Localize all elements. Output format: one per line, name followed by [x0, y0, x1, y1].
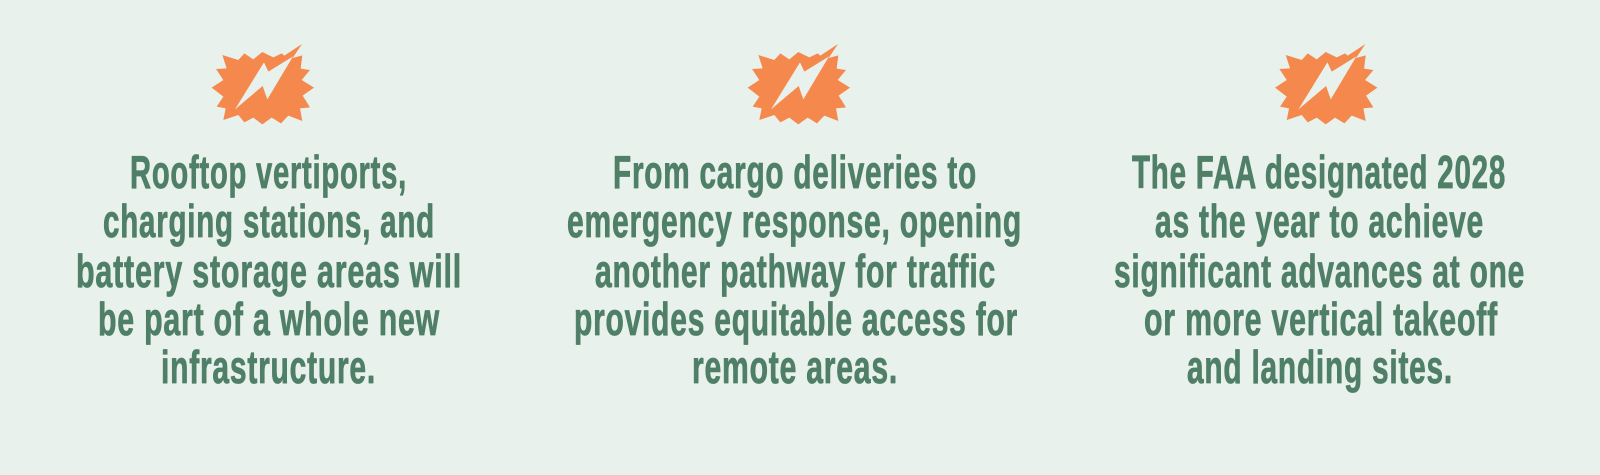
panel: cargo and emergency response	[567, 44, 1022, 393]
text: FAA 2028 description	[1114, 146, 1525, 393]
text: FAA 2028 description: and landing sites.	[1187, 341, 1453, 393]
text: rooftop vertiports description: charging stations, and	[103, 195, 435, 247]
text: rooftop vertiports description: battery storage areas will	[76, 245, 462, 297]
panel: rooftop vertiports	[76, 44, 462, 393]
text: cargo and emergency description: another pathway for traffic	[595, 245, 996, 297]
icon: orange burst with lightning bolt	[212, 44, 314, 124]
text: cargo and emergency description	[567, 146, 1022, 393]
icon: orange burst with lightning bolt	[1275, 44, 1377, 124]
text: cargo and emergency description: From cargo deliveries to	[613, 146, 977, 198]
text: rooftop vertiports description	[76, 146, 462, 393]
text: rooftop vertiports description: infrastructure.	[161, 341, 376, 393]
icon: orange burst with lightning bolt	[748, 44, 850, 124]
text: rooftop vertiports description: be part of a whole new	[98, 293, 440, 345]
panel: FAA 2028 goal	[1114, 44, 1525, 393]
text: cargo and emergency description: remote areas.	[692, 341, 898, 393]
text: cargo and emergency description: provides equitable access for	[574, 293, 1018, 345]
text: cargo and emergency description: emergency response, opening	[567, 195, 1022, 247]
text: rooftop vertiports description: Rooftop vertiports,	[130, 146, 407, 198]
